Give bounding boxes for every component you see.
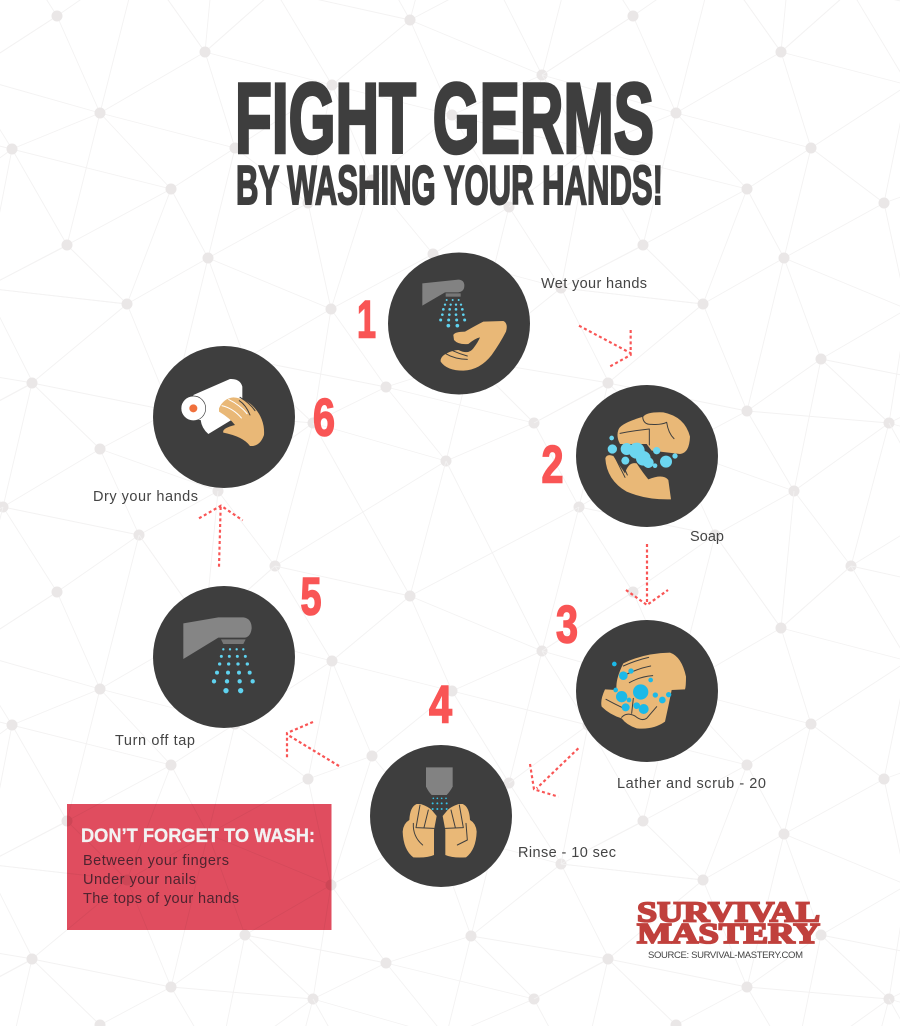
icon: tap over hand <box>388 252 530 394</box>
logo: survival mastery: MASTERY <box>637 918 820 950</box>
number 2: 2 <box>542 436 564 494</box>
number 5: 5 <box>300 568 322 626</box>
number 1: 1 <box>357 290 376 350</box>
icon: running tap <box>153 586 295 728</box>
callout heading: DON’T FORGET TO WASH: <box>81 825 315 847</box>
logo: survival mastery <box>637 896 820 961</box>
label: Soap <box>690 529 724 545</box>
arrow 4 to 5 <box>287 722 339 766</box>
icon: lathered hands <box>576 620 718 762</box>
logo: survival mastery: SURVIVAL <box>637 896 820 928</box>
callout list: The tops of your hands <box>83 891 239 907</box>
icon: hands under tap <box>370 745 512 887</box>
label: Wet your hands <box>541 276 647 292</box>
icon: paper towel and hand <box>153 346 295 488</box>
step 1: wet your hands <box>357 252 647 394</box>
callout: don't forget to wash <box>67 804 332 930</box>
step 5: turn off tap <box>115 568 322 749</box>
number 6: 6 <box>313 388 335 448</box>
label: Dry your hands <box>93 489 198 505</box>
step 4: rinse <box>370 676 616 887</box>
number 3: 3 <box>556 596 578 654</box>
number 4: 4 <box>429 676 452 734</box>
callout list <box>83 853 239 907</box>
arrow 3 to 4 <box>530 748 578 797</box>
step 3: lather and scrub <box>556 596 766 792</box>
label: Turn off tap <box>115 733 195 749</box>
step 2: soap <box>542 385 724 545</box>
icon: soapy hands <box>576 385 718 527</box>
arrow 5 to 6 <box>199 506 243 567</box>
label: Rinse - 10 sec <box>518 845 616 861</box>
arrow 1 to 2 <box>579 326 631 367</box>
arrow 2 to 3 <box>626 544 668 605</box>
step 6: dry your hands <box>93 346 335 505</box>
callout list: Under your nails <box>83 872 196 888</box>
title <box>235 62 663 216</box>
source line: SOURCE: SURVIVAL-MASTERY.COM <box>648 950 803 961</box>
label: Lather and scrub - 20 <box>617 776 766 792</box>
callout list: Between your fingers <box>83 853 229 869</box>
